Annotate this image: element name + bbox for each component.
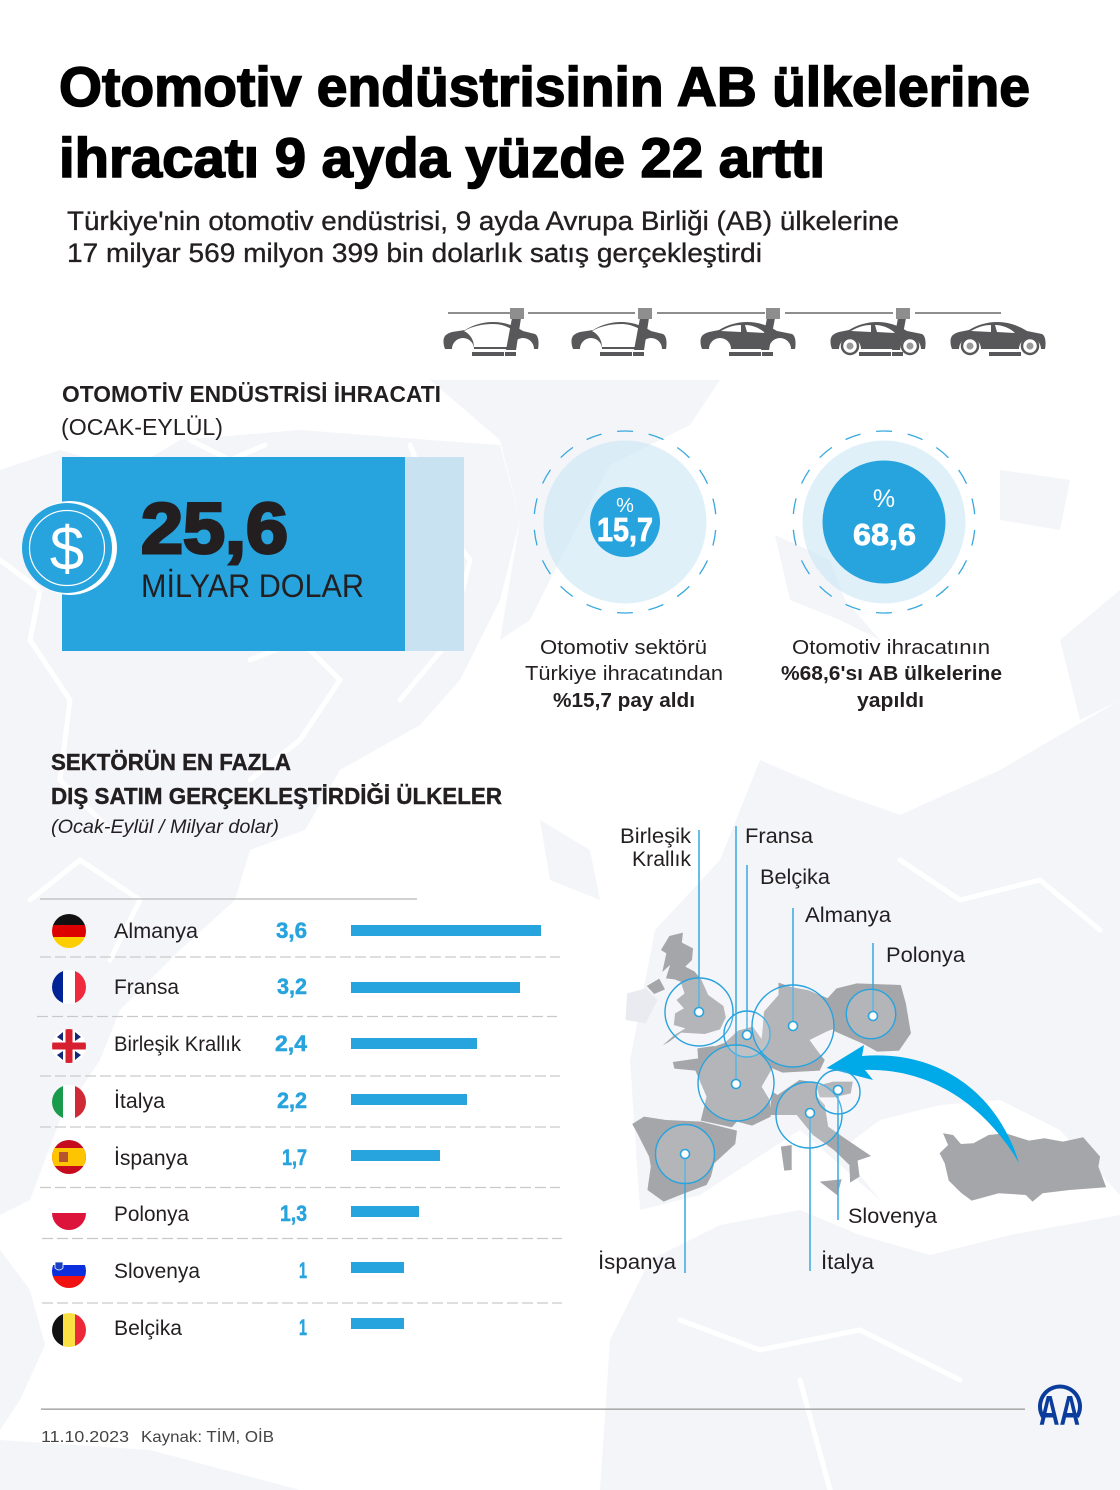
row: Birleşik Krallık (52, 1029, 477, 1063)
row: Fransa: 3,2 (277, 974, 307, 999)
row: İtalya (52, 1085, 467, 1119)
marker: İspanya (598, 1124, 714, 1274)
panel: total export value (22, 457, 464, 651)
row: Slovenya (52, 1262, 404, 1288)
chart: share 68.6 percent: % (873, 485, 895, 513)
row: Polonya: Polonya (114, 1203, 189, 1226)
row: İtalya: 2,2 (277, 1088, 307, 1113)
row: İtalya: İtalya (114, 1090, 165, 1113)
marker: Fransa: Fransa (745, 825, 813, 848)
chart: share 68.6 percent: 68,6 (853, 517, 916, 552)
marker: İtalya (776, 1082, 874, 1274)
bar chart: countries (37, 899, 562, 1347)
icon: car assembly line (443, 308, 1046, 356)
marker: Fransa (698, 825, 813, 1121)
arrow: Turkey to Europe (826, 1045, 1019, 1163)
source note: 11.10.2023 (41, 1429, 129, 1446)
source note: Kaynak: TİM, OİB (141, 1427, 274, 1446)
chart: share 15.7 percent: 15,7 (597, 511, 653, 548)
subtitle (67, 206, 899, 268)
heading: top countries: (Ocak-Eylül / Milyar dolar) (51, 817, 279, 838)
big number: 25,6 (141, 490, 288, 569)
marker: Birleşik Krallık: Krallık (632, 848, 691, 871)
background world map (0, 380, 1120, 1490)
footer rule (41, 1408, 1025, 1410)
row: Slovenya: Slovenya (114, 1260, 200, 1283)
row: Polonya (52, 1205, 419, 1230)
row: Almanya: 3,6 (276, 918, 307, 943)
heading: export section: OTOMOTİV ENDÜSTRİSİ İHRACATI (62, 381, 441, 407)
chart: share 15.7 percent (534, 431, 716, 613)
marker: Polonya: Polonya (886, 944, 965, 967)
caption: sector share (525, 637, 723, 712)
heading: top countries: DIŞ SATIM GERÇEKLEŞTİRDİĞİ ÜLKELER (51, 782, 502, 809)
heading: export section (61, 381, 441, 440)
row: Fransa: Fransa (114, 976, 179, 999)
map: Europe and Turkey (598, 825, 1106, 1274)
marker: İspanya: İspanya (598, 1251, 676, 1274)
marker: Almanya: Almanya (805, 904, 891, 927)
caption: EU share: Otomotiv ihracatının (792, 637, 990, 659)
title: Otomotiv endüstrisinin AB ülkelerine (59, 55, 1030, 118)
marker: Slovenya: Slovenya (848, 1205, 937, 1228)
marker: Birleşik Krallık: Birleşik (620, 825, 692, 848)
marker: Polonya (846, 943, 965, 1039)
caption: EU share: yapıldı (857, 690, 924, 712)
row: İspanya: 1,7 (282, 1145, 307, 1170)
caption: EU share: %68,6'sı AB ülkelerine (781, 663, 1002, 685)
unit label: MİLYAR DOLAR (141, 568, 364, 604)
marker: Birleşik Krallık (620, 825, 733, 1046)
row: Birleşik Krallık: Birleşik Krallık (114, 1033, 241, 1056)
caption: sector share: %15,7 pay aldı (553, 690, 695, 712)
title: ihracatı 9 ayda yüzde 22 arttı (59, 126, 825, 189)
row: Birleşik Krallık: 2,4 (275, 1031, 308, 1056)
caption: sector share: Türkiye ihracatından (525, 663, 723, 685)
marker: Belçika: Belçika (760, 866, 830, 889)
title (59, 55, 1030, 189)
row: Belçika: Belçika (114, 1317, 182, 1340)
row: İspanya (52, 1140, 440, 1174)
icon: dollar coin: $ (50, 515, 84, 584)
chart: share 15.7 percent: % (616, 495, 634, 517)
land shapes (625, 933, 1106, 1202)
caption: EU share (781, 637, 1002, 712)
row: Polonya: 1,3 (280, 1201, 307, 1226)
subtitle: 17 milyar 569 milyon 399 bin dolarlık satış gerçekleştirdi (67, 238, 762, 268)
marker: Slovenya (816, 1070, 937, 1228)
row: Slovenya: 1 (299, 1258, 307, 1283)
marker: İtalya: İtalya (821, 1251, 874, 1274)
heading: top countries (51, 749, 502, 838)
icon: dollar coin (22, 501, 117, 595)
row: Belçika: 1 (299, 1315, 307, 1340)
row: İspanya: İspanya (114, 1147, 188, 1170)
logo: AA (1039, 1386, 1080, 1434)
source note (41, 1427, 274, 1446)
marker: Almanya (752, 904, 891, 1067)
row: Fransa (52, 970, 520, 1004)
caption: sector share: Otomotiv sektörü (540, 637, 707, 659)
subtitle: Türkiye'nin otomotiv endüstrisi, 9 ayda Avrupa Birliği (AB) ülkelerine (67, 206, 899, 236)
row: Almanya (52, 914, 541, 949)
row: Belçika (52, 1313, 404, 1347)
heading: export section: (OCAK-EYLÜL) (61, 414, 223, 440)
chart: share 68.6 percent (793, 431, 975, 613)
heading: top countries: SEKTÖRÜN EN FAZLA (51, 749, 291, 775)
logo: AA: AA (1039, 1387, 1080, 1434)
row: Almanya: Almanya (114, 920, 198, 943)
marker: Belçika (724, 865, 830, 1057)
